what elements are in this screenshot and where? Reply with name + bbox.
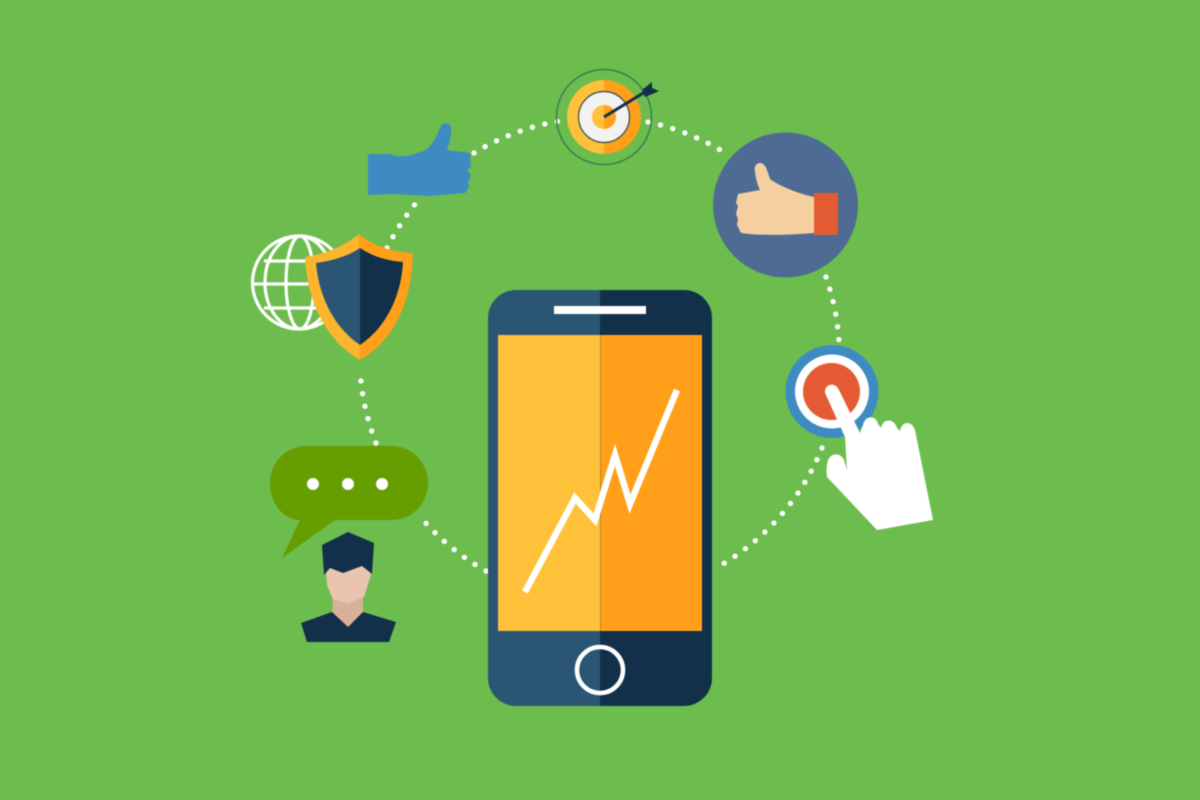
speaker bar [554, 306, 646, 314]
dotted ring connecting icons [360, 121, 839, 571]
icon: target with arrow [556, 70, 659, 164]
rising line chart [525, 390, 677, 592]
home button [577, 647, 623, 693]
icon: blue thumbs up [368, 123, 471, 196]
icon: hand thumbs up in circle [713, 132, 858, 278]
icon: shield [305, 234, 413, 360]
phone screen [498, 335, 702, 631]
icon: person [301, 532, 396, 642]
icon: globe [252, 236, 346, 329]
smartphone [488, 290, 712, 706]
icon: button press with pointing hand [786, 345, 933, 530]
icon: speech bubble [270, 446, 428, 558]
